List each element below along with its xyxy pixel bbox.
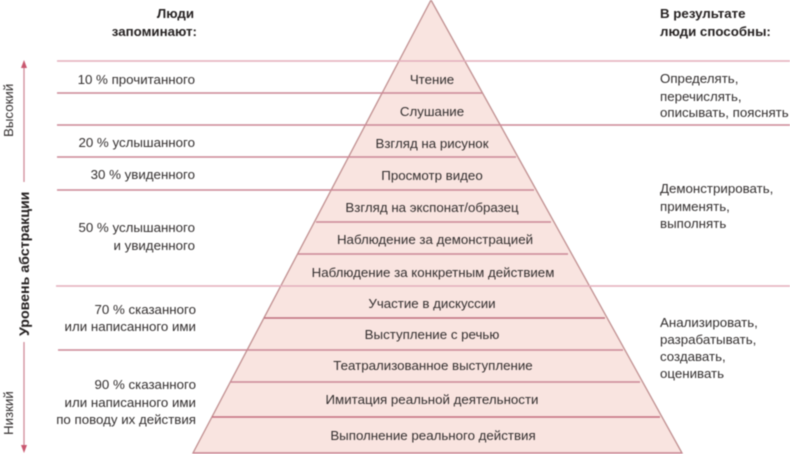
pyramid level labels: Наблюдение за демонстрацией <box>337 232 533 247</box>
abilities: demonstrate: применять, <box>660 199 730 214</box>
heading: people remember: Люди <box>157 6 194 21</box>
abilities: demonstrate: Демонстрировать, <box>660 181 773 196</box>
axis label: high: Высокий <box>1 84 16 137</box>
pyramid level labels: Чтение <box>410 72 454 87</box>
abilities: analyze: разрабатывать, <box>660 332 756 347</box>
abilities: demonstrate: выполнять <box>660 216 726 231</box>
retention percentages: 70 % сказанного <box>94 302 196 317</box>
pyramid level labels: Взгляд на экспонат/образец <box>345 200 519 215</box>
axis label: abstraction level: Уровень абстракции <box>17 192 33 336</box>
abstraction level arrow up <box>21 60 27 182</box>
retention percentages: и увиденного <box>114 238 195 253</box>
heading: people remember: запоминают: <box>112 24 197 39</box>
heading: people remember <box>112 6 197 39</box>
abilities: analyze: создавать, <box>660 349 726 364</box>
abilities: demonstrate <box>660 181 773 231</box>
retention percentages: или написанного ими <box>65 395 196 410</box>
retention percentages: 10 % прочитанного <box>78 72 195 87</box>
pyramid level labels: Театрализованное выступление <box>333 358 533 373</box>
abilities: define: перечислять, <box>660 89 742 104</box>
retention percentages: или написанного ими <box>65 319 196 334</box>
retention percentages: 30 % увиденного <box>91 167 195 182</box>
abilities: define: Определять, <box>660 71 738 86</box>
pyramid level labels: Просмотр видео <box>381 168 483 183</box>
pyramid level labels: Имитация реальной деятельности <box>326 392 538 407</box>
pyramid level labels: Участие в дискуссии <box>368 296 496 311</box>
abilities: analyze: оценивать <box>660 366 724 381</box>
retention percentages: по поводу их действия <box>56 412 196 427</box>
pyramid level labels: Наблюдение за конкретным действием <box>312 265 554 280</box>
pyramid level labels: Взгляд на рисунок <box>375 136 489 151</box>
abilities: define: описывать, пояснять <box>660 105 789 120</box>
heading: people are able <box>660 6 771 39</box>
retention percentages: 50 % услышанного <box>78 220 195 235</box>
abilities: analyze: Анализировать, <box>660 315 758 330</box>
abilities: analyze <box>660 315 758 381</box>
axis label: low: Низкий <box>1 391 16 435</box>
heading: people are able: В результате <box>660 6 746 21</box>
pyramid level labels: Выступление с речью <box>365 327 499 342</box>
heading: people are able: люди способны: <box>660 24 771 39</box>
pyramid level labels <box>312 72 554 443</box>
abilities: define <box>660 71 789 120</box>
retention percentages <box>56 72 196 427</box>
pyramid level labels: Слушание <box>400 104 464 119</box>
pyramid level labels: Выполнение реального действия <box>330 428 536 443</box>
retention percentages: 20 % услышанного <box>78 135 195 150</box>
abstraction level arrow down <box>21 342 27 453</box>
retention percentages: 90 % сказанного <box>94 377 196 392</box>
